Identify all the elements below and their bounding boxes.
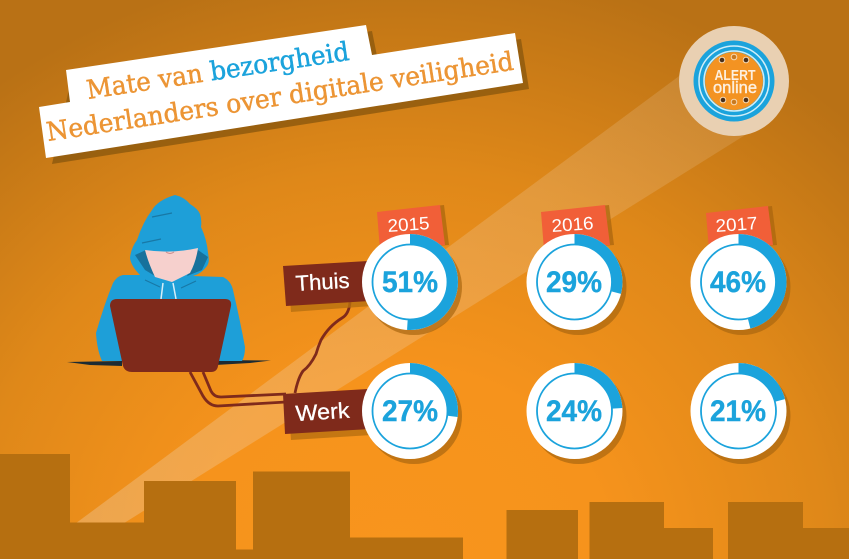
title banner — [39, 25, 529, 164]
donut: Werk 2017 21%: 21% — [710, 395, 766, 428]
donut: Werk 2017 21% — [690, 363, 790, 464]
label: Werk — [283, 389, 372, 440]
label: Thuis — [283, 261, 372, 312]
mouth — [166, 252, 174, 254]
year tag 2016 — [541, 205, 614, 250]
banner shadow — [52, 31, 529, 164]
donut: Werk 2016 24% — [526, 363, 626, 464]
skyline left — [0, 454, 463, 559]
donut: Thuis 2017 46%: 46% — [710, 266, 766, 299]
year tag 2015 — [377, 205, 449, 250]
year tag 2017: 2017 — [715, 213, 758, 236]
logo text: ALERT: ALERT — [714, 67, 756, 84]
donut: Thuis 2017 46% — [690, 234, 790, 335]
skyline right — [506, 502, 849, 559]
hood inner shadows — [135, 250, 208, 276]
donut: Werk 2016 24%: 24% — [546, 395, 602, 428]
year tag 2015: 2015 — [387, 213, 430, 236]
donut: Thuis 2016 29% — [526, 234, 626, 335]
donut: Werk 2015 27%: 27% — [382, 395, 438, 428]
face — [145, 248, 198, 282]
year tag 2017 — [706, 206, 777, 250]
hood folds — [142, 213, 196, 288]
hoodie — [96, 195, 245, 361]
light beam from logo — [60, 68, 750, 535]
hacker illustration — [67, 195, 271, 372]
label: Werk: Werk — [295, 398, 351, 426]
logo text: online: online — [713, 78, 757, 97]
donut: Thuis 2015 51%: 51% — [382, 266, 438, 299]
label: Thuis: Thuis — [295, 268, 350, 296]
hoodie strings — [161, 283, 176, 299]
title line 2: Nederlanders over digitale veiligheid — [45, 47, 516, 148]
donut: Thuis 2015 51% — [362, 234, 462, 335]
banner white shape — [39, 25, 523, 158]
donut: Werk 2015 27% — [362, 363, 462, 464]
logo: Alert Online — [679, 26, 789, 136]
laptop — [110, 299, 231, 372]
title line 1: Mate van bezorgheid — [85, 37, 351, 106]
year tag 2016: 2016 — [551, 213, 594, 236]
table line — [67, 360, 271, 366]
donut: Thuis 2016 29%: 29% — [546, 266, 602, 299]
wires from laptop to labels — [190, 302, 350, 406]
